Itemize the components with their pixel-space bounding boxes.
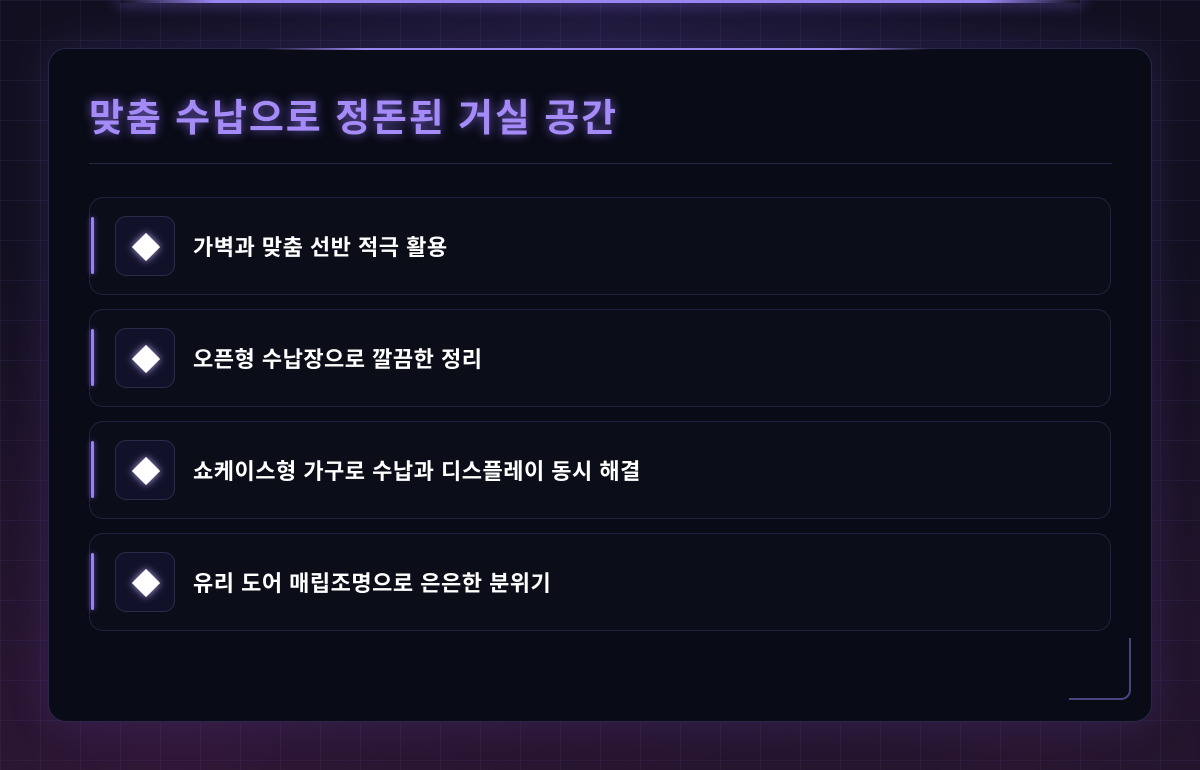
icon: diamond bbox=[115, 552, 175, 612]
text: 오픈형 수납장으로 깔끔한 정리 bbox=[193, 347, 482, 372]
title: 맞춤 수납으로 정돈된 거실 공간 bbox=[89, 98, 618, 140]
corner accent bbox=[1069, 638, 1131, 700]
item 1 bbox=[89, 197, 1111, 295]
item 4 bbox=[89, 533, 1111, 631]
icon: diamond bbox=[115, 216, 175, 276]
text: 유리 도어 매립조명으로 은은한 분위기 bbox=[193, 571, 551, 596]
icon: diamond bbox=[115, 328, 175, 388]
icon: diamond bbox=[115, 440, 175, 500]
item 3 bbox=[89, 421, 1111, 519]
text: 가벽과 맞춤 선반 적극 활용 bbox=[193, 235, 448, 260]
text: 쇼케이스형 가구로 수납과 디스플레이 동시 해결 bbox=[193, 459, 641, 484]
item 2 bbox=[89, 309, 1111, 407]
